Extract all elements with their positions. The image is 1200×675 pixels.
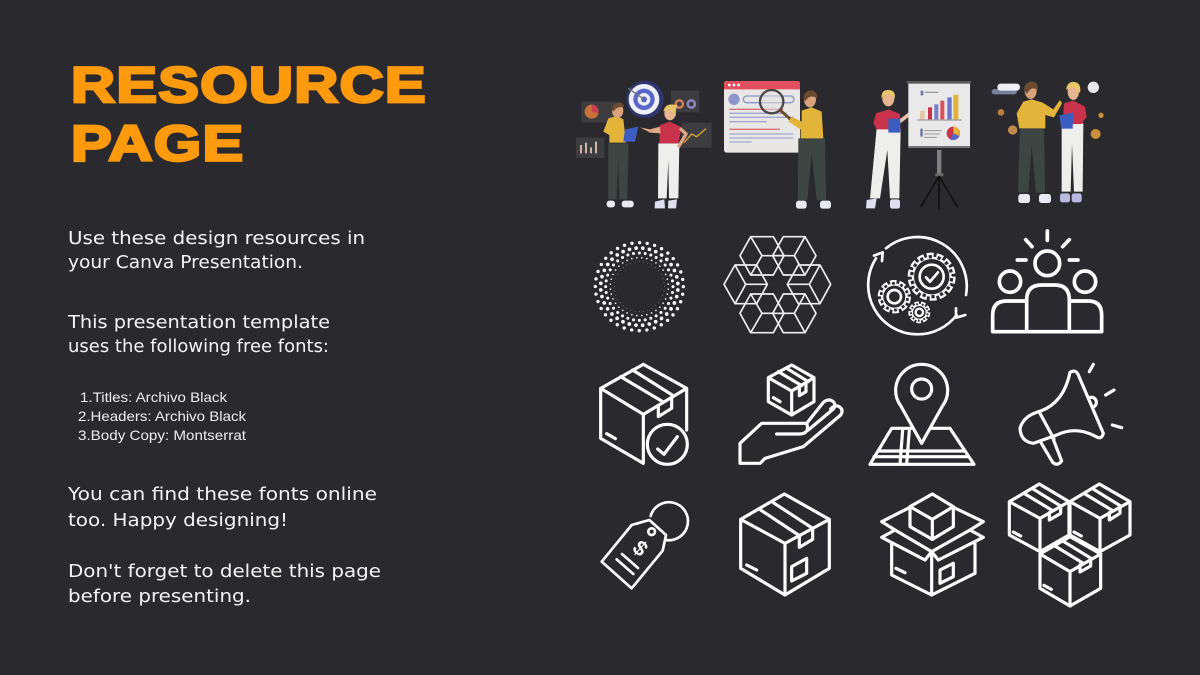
icon: box with check: [601, 364, 687, 464]
text block: reminder: before presenting.: [68, 586, 251, 607]
icon: map pin: [870, 364, 974, 464]
icon: hand holding box: [740, 365, 842, 463]
title: PAGE: [71, 115, 244, 171]
icon: stack of boxes: [1009, 484, 1130, 606]
gear: small: [911, 304, 928, 321]
list: fonts: 2.Headers: Archivo Black: [78, 408, 247, 424]
icon: dotted ring: [595, 243, 683, 331]
text block: fonts intro: uses the following free fonts:: [68, 336, 329, 357]
icon: closed box: [741, 494, 829, 595]
icon: price tag: [602, 502, 688, 588]
text block: reminder: Don't forget to delete this page: [68, 561, 381, 582]
title: [71, 56, 427, 171]
gear: large: [912, 257, 952, 297]
list: fonts: [78, 389, 247, 443]
icon: gears with cycle arrows: [868, 237, 967, 334]
text block: intro: [68, 228, 365, 273]
icon: megaphone: [1020, 364, 1122, 464]
text block: find fonts: You can find these fonts online: [67, 484, 377, 505]
icon: price tag: $: [628, 536, 653, 561]
icon: team with idea rays: [993, 231, 1102, 332]
text block: fonts intro: This presentation template: [67, 312, 330, 333]
text block: find fonts: too. Happy designing!: [68, 510, 288, 531]
icon: open box: [882, 494, 983, 595]
text block: find fonts: [67, 484, 377, 531]
text block: intro: your Canva Presentation.: [68, 252, 303, 273]
text block: reminder: [68, 561, 381, 607]
text block: intro: Use these design resources in: [68, 228, 365, 249]
illustration: team with target and charts: [576, 81, 831, 209]
list: fonts: 3.Body Copy: Montserrat: [78, 427, 246, 443]
title: RESOURCE: [71, 56, 427, 113]
gear: medium: [881, 283, 908, 310]
icon: hexagonal cubes: [724, 237, 831, 333]
text block: fonts intro: [67, 312, 330, 357]
illustration: presenter with chart board: [866, 81, 1104, 209]
list: fonts: 1.Titles: Archivo Black: [80, 389, 228, 405]
